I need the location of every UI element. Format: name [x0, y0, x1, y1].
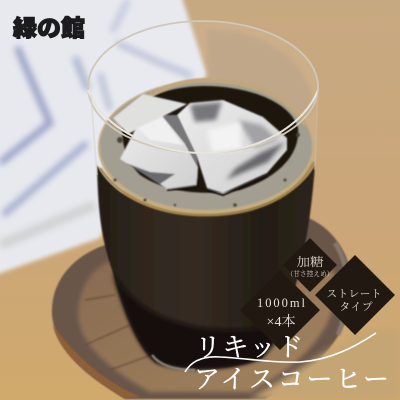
title swoosh: [185, 333, 376, 372]
ice cube front left: [120, 115, 198, 190]
glass interior above the drink: [88, 21, 318, 170]
badge: sweetened: 加糖: [296, 254, 324, 269]
soft light patch at bottom right: [250, 330, 400, 399]
title: リキッド: [195, 333, 303, 362]
coaster: [52, 215, 400, 399]
coffee body: [97, 165, 315, 369]
badge: volume: [240, 270, 320, 350]
glass of iced coffee: [88, 21, 318, 370]
tan foam rim at back: [115, 80, 305, 128]
gold edge of foam: [100, 162, 314, 215]
coffee surface: [122, 86, 298, 193]
badge: sweetened: [283, 238, 337, 292]
foam ring: [98, 80, 314, 214]
badge: volume: 1000ml: [257, 296, 306, 310]
title: アイスコーヒー: [194, 365, 389, 394]
gap between ice cubes: [162, 115, 198, 167]
glass rim: [88, 21, 318, 153]
badge: straight type: ストレート: [326, 289, 382, 300]
logo: 緑の館: [13, 9, 85, 43]
white cloth with blue stripes: [0, 0, 207, 276]
thick glass base highlight: [152, 355, 195, 370]
badge: sweetened: （甘さ控えめ）: [286, 269, 334, 278]
glass side highlights: [91, 95, 97, 175]
badge: straight type: [315, 255, 395, 335]
badge: straight type: タイプ: [340, 301, 373, 313]
ice cube left back: [113, 94, 187, 134]
title: [194, 333, 389, 394]
ice cube right: [177, 100, 287, 195]
foam specks: [114, 133, 300, 207]
dark lower band of the drink: [112, 272, 285, 369]
badge: volume: ×4本: [267, 313, 295, 330]
